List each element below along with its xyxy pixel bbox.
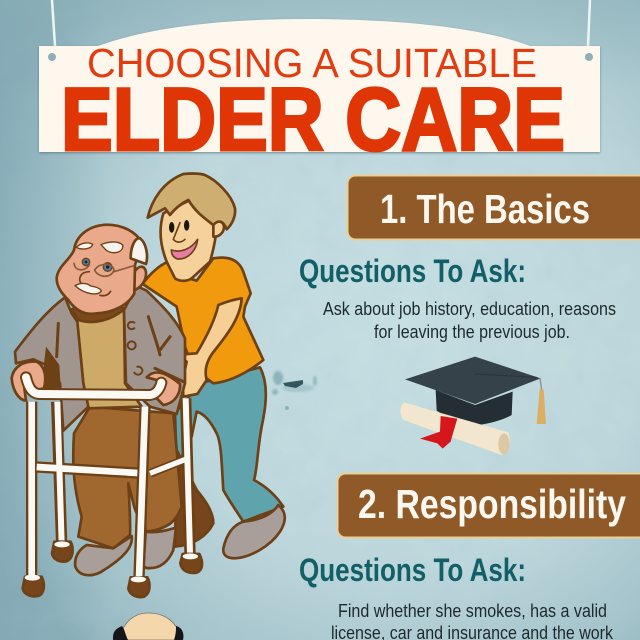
elder left shoe: [75, 536, 132, 575]
elder jacket left: [15, 297, 88, 431]
elder glasses: [74, 263, 134, 276]
walker handle: [26, 377, 161, 395]
title sign: [39, 19, 600, 169]
cap base: [436, 390, 513, 425]
elder collar: [72, 305, 124, 322]
elder eyebrows: [76, 242, 123, 253]
walker legs outline: [32, 398, 190, 578]
elder right shoe: [143, 528, 176, 568]
section 2 banner: [338, 474, 640, 538]
caregiver arm and hand: [175, 298, 242, 397]
section 1 body text: [323, 299, 616, 342]
section 1 banner: [348, 176, 640, 240]
section 2 heading: Questions To Ask:: [299, 552, 526, 588]
section 1 banner: 1. The Basics: [380, 186, 590, 232]
illustration: caregiver helping an elderly man with a walker: [12, 174, 285, 597]
elder nose: [80, 272, 89, 284]
walker: [32, 398, 190, 578]
elder shirt: [77, 309, 142, 408]
elder far pant leg: [175, 450, 213, 547]
section 1 heading: Questions To Ask:: [299, 253, 526, 289]
elder ear: [132, 267, 146, 291]
caregiver eyes: [169, 220, 189, 233]
elder moustache: [75, 283, 101, 294]
section 2 body text: Find whether she smokes, has a valid: [338, 601, 607, 621]
caregiver jeans: [175, 367, 283, 522]
cap board: [405, 357, 541, 404]
tassel: [540, 378, 542, 390]
title line 2: ELDER CARE: [61, 69, 565, 169]
walker legs white: [32, 398, 190, 578]
elder hands: [12, 362, 45, 401]
elder head: [57, 225, 142, 314]
caregiver shoe: [223, 505, 285, 558]
elder pants: [73, 407, 182, 548]
elder smile: [100, 291, 111, 296]
jacket underarm shadow: [43, 347, 61, 388]
elder side hair: [131, 238, 147, 264]
title line 1: CHOOSING A SUITABLE: [87, 40, 537, 86]
section 2 body text: [331, 601, 614, 640]
diploma: [400, 402, 510, 455]
caregiver ear: [213, 221, 224, 237]
bald man head, partly visible: [113, 613, 183, 640]
ink splatter: [272, 371, 317, 410]
elder jacket right: [124, 286, 185, 414]
icon: graduation cap and diploma: [400, 357, 546, 455]
caregiver mouth: [171, 239, 198, 259]
walker feet: [23, 542, 202, 597]
section 1 body text: for leaving the previous job.: [374, 322, 570, 342]
ribbon: [420, 416, 457, 449]
caregiver hair: [148, 174, 235, 229]
walker foot caps: [25, 541, 198, 582]
elder eyes: [82, 258, 112, 271]
caregiver nose: [173, 223, 185, 242]
caregiver shirt: [143, 258, 263, 383]
jacket buttons: [128, 322, 142, 375]
caregiver neck and face: [161, 200, 217, 281]
hanging straps: [52, 0, 590, 46]
jacket details: [57, 317, 183, 382]
